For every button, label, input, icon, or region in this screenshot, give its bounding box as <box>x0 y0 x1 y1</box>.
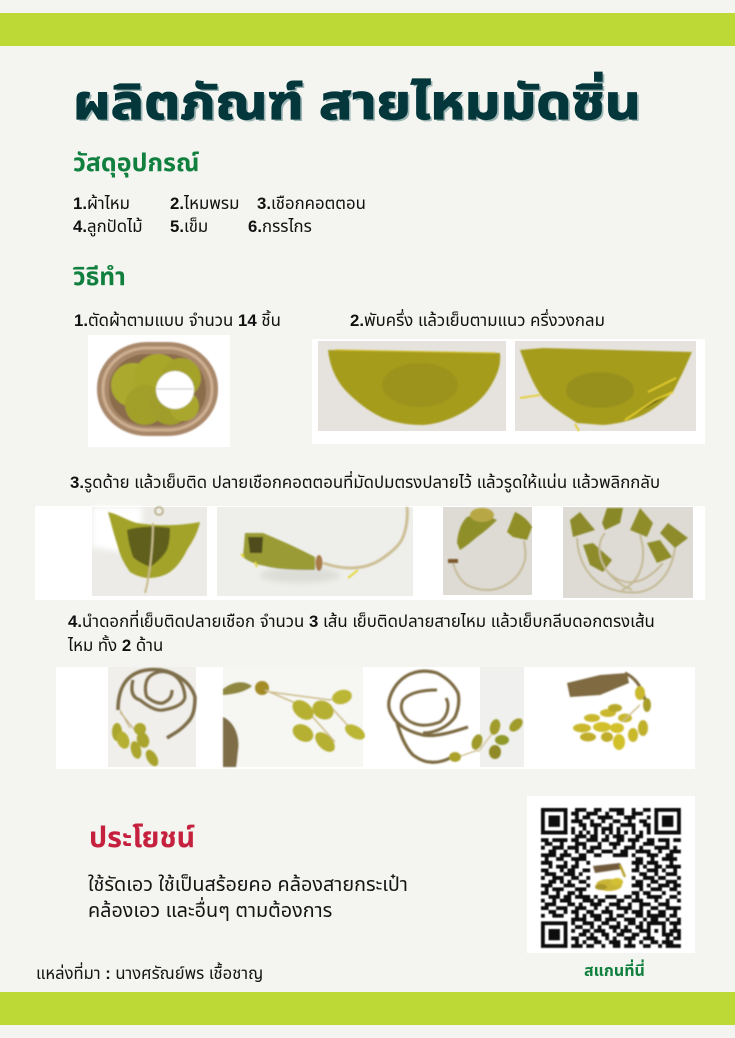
heading: benefits: ประโยชน์ <box>89 822 195 854</box>
benefits text <box>88 874 408 922</box>
bottom band <box>0 992 735 1025</box>
materials list: 4.ลูกปัดไม้ <box>73 217 143 236</box>
materials list: 2.ไหมพรม <box>170 194 239 213</box>
heading: materials: วัสดุอุปกรณ์ <box>73 149 199 177</box>
photos: folded half circles <box>312 339 705 444</box>
step 1 text: 1.ตัดผ้าตามแบบ จำนวน 14 ชิ้น <box>74 311 281 330</box>
photos: finished silk cords <box>56 667 695 769</box>
QR code <box>527 796 695 953</box>
step 3 text: 3.รูดด้าย แล้วเย็บติด ปลายเชือกคอตตอนที่มัดปมตรงปลายไว้ แล้วรูดให้แน่น แล้วพลิกกลับ <box>70 473 660 492</box>
step 2 text: 2.พับครึ่ง แล้วเย็บตามแนว ครึ่งวงกลม <box>350 311 605 330</box>
benefits text: ใช้รัดเอว ใช้เป็นสร้อยคอ คล้องสายกระเป๋า <box>88 874 408 896</box>
scan here label: สแกนที่นี่ <box>584 963 645 980</box>
materials list: 1.ผ้าไหม <box>73 194 130 213</box>
source credit: แหล่งที่มา : นางศรัณย์พร เชื้อชาญ <box>36 964 263 983</box>
step 4 text: ไหม ทั้ง 2 ด้าน <box>68 636 163 655</box>
heading: method: วิธีทำ <box>73 264 126 291</box>
materials list <box>73 194 366 236</box>
benefits text: คล้องเอว และอื่นๆ ตามต้องการ <box>88 900 332 922</box>
materials list: 3.เชือกคอตตอน <box>257 194 366 213</box>
top band <box>0 13 735 46</box>
step 4 text: 4.นำดอกที่เย็บติดปลายเชือก จำนวน 3 เส้น เย็บติดปลายสายไหม แล้วเย็บกลีบดอกตรงเส้น <box>68 612 655 631</box>
step 4 text <box>68 610 655 655</box>
photos: gathered flowers on cord <box>35 506 705 600</box>
materials list: 5.เข็ม <box>170 217 208 236</box>
materials list: 6.กรรไกร <box>248 217 312 236</box>
QR centre product image <box>593 863 625 891</box>
title: ผลิตภัณฑ์ สายไหมมัดซิ่น <box>73 77 641 130</box>
photo: cut silk circles in basket <box>88 335 230 447</box>
